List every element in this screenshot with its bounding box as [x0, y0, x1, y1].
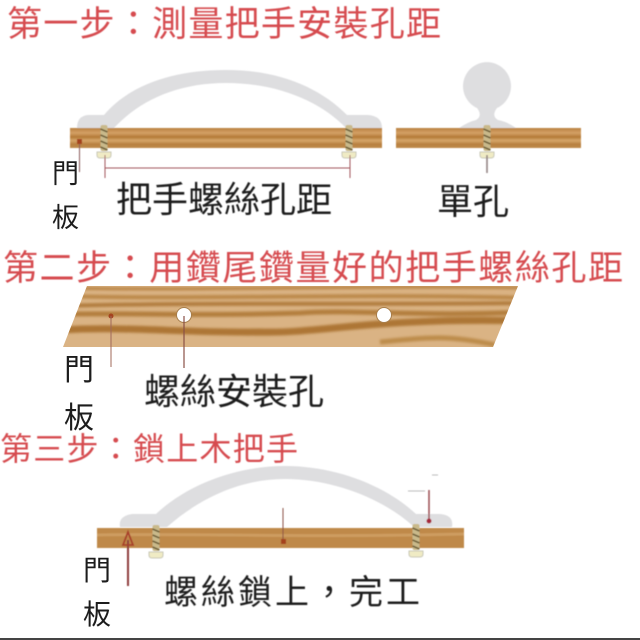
label: screw mounting hole: 螺絲安裝孔	[144, 371, 324, 412]
diagram: installed handle	[97, 466, 464, 586]
diagram: drilled door panel	[60, 286, 530, 368]
title: step 3: 第三步：鎖上木把手	[0, 431, 298, 467]
title: step 1: 第一步：測量把手安裝孔距	[7, 5, 441, 44]
knob: round grey pull	[459, 62, 516, 128]
drilled hole: left	[176, 308, 192, 322]
title: step 2: 第二步：用鑽尾鑽量好的把手螺絲孔距	[3, 249, 623, 288]
label: door panel, step 3: 板	[83, 599, 111, 630]
door panel wood	[70, 128, 382, 148]
handle: arched grey pull	[77, 70, 382, 128]
handle: arched grey pull	[120, 466, 452, 527]
label: door panel, step 1: 門	[52, 159, 79, 189]
label: single hole: 單孔	[437, 181, 509, 222]
label: door panel, step 1: 板	[52, 203, 79, 233]
drilled hole: right	[376, 308, 392, 322]
dimension line: screw hole spacing	[105, 155, 350, 178]
icon: left screw	[97, 125, 111, 158]
door panel wood	[396, 128, 581, 148]
label: door panel, step 3	[83, 555, 111, 630]
icon: right screw	[409, 524, 423, 557]
leader: screw hole	[183, 316, 185, 368]
icon: right screw	[342, 125, 356, 158]
marker: door panel leader	[108, 314, 114, 367]
label: handle screw hole spacing: 把手螺絲孔距	[116, 179, 332, 220]
diagram: double-hole handle on door panel	[70, 70, 382, 178]
label: door panel, step 2	[64, 354, 94, 435]
label: screw locked, finished: 螺絲鎖上，完工	[164, 574, 420, 612]
door panel wood	[97, 528, 464, 548]
arrow: door panel	[123, 532, 133, 586]
diagram: single-hole knob on door panel	[396, 62, 581, 173]
icon: left screw	[149, 525, 163, 558]
marker: center leader	[281, 508, 286, 544]
label: door panel, step 1	[52, 159, 79, 233]
label: door panel, step 3: 門	[83, 555, 111, 586]
label: door panel, step 2: 門	[64, 354, 94, 387]
label: door panel, step 2: 板	[64, 402, 94, 435]
door panel with grain	[60, 286, 530, 347]
leader line	[486, 155, 488, 173]
marker: door panel dot and leader	[77, 139, 82, 172]
marker: handle leader	[408, 475, 438, 524]
bottom edge line	[0, 638, 640, 640]
icon: knob screw	[480, 125, 494, 158]
